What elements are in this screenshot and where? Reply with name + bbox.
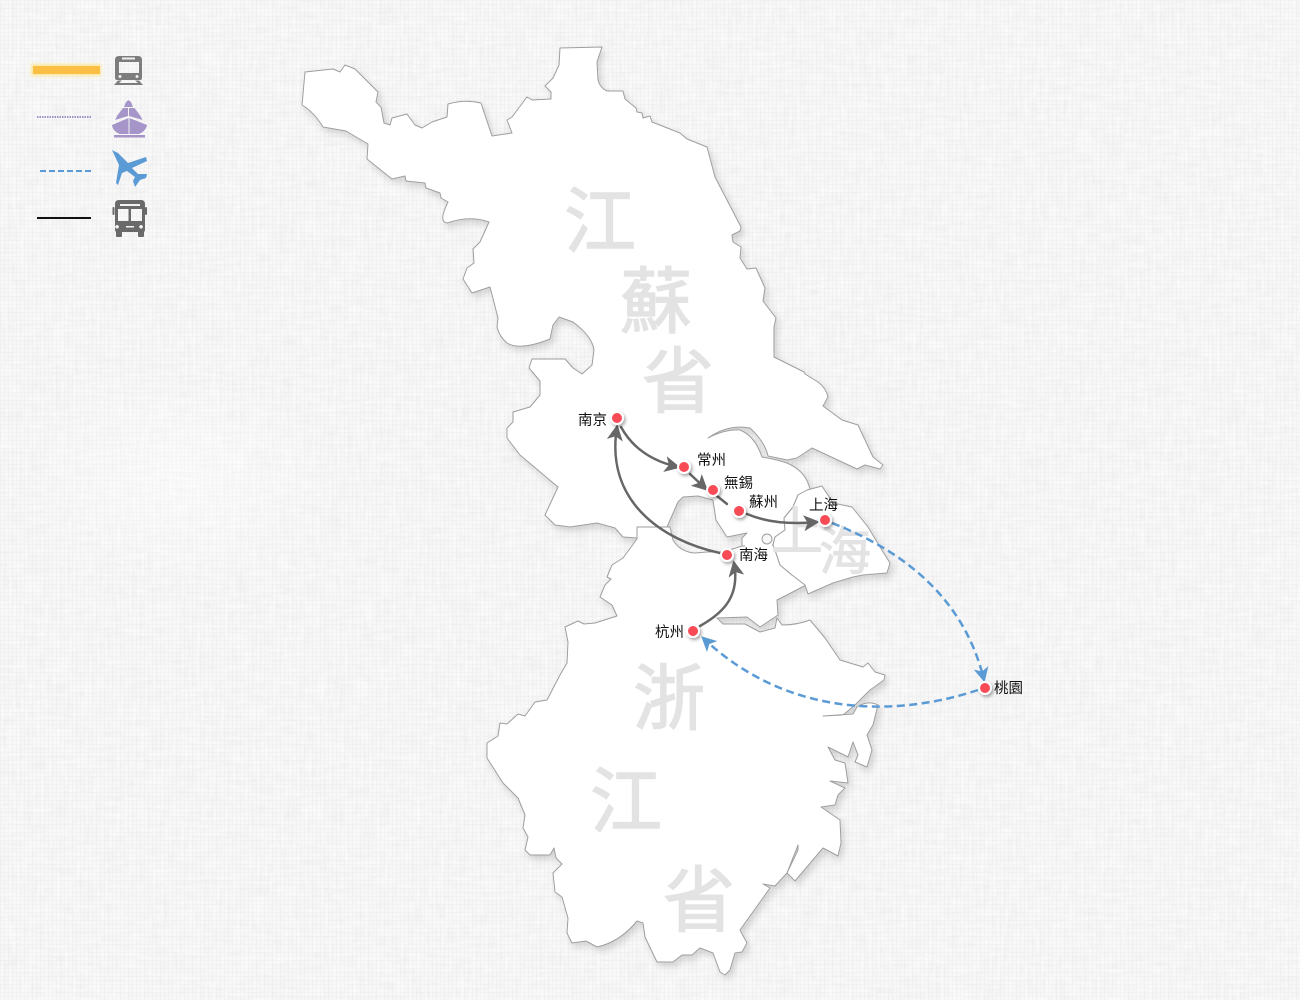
city: Shanghai (809, 497, 838, 527)
city: Changzhou (677, 452, 726, 474)
route: Shanghai to Taoyuan (832, 523, 984, 680)
legend: bus line (37, 217, 91, 219)
city: Wuxi (706, 475, 753, 497)
map: provinces (302, 47, 890, 975)
lake: Dianshan (762, 534, 772, 544)
route: Nanhai to Nanjing (615, 427, 720, 553)
city: Shanghai: 上海 (809, 497, 838, 514)
region: Shanghai (773, 486, 890, 594)
watermark: Shanghai: 上 (771, 504, 823, 562)
city: Changzhou: 常州 (697, 452, 726, 469)
watermark: Zhejiang (590, 660, 735, 942)
watermark: Zhejiang: 浙 (633, 660, 705, 740)
icon: bus (112, 200, 147, 237)
route: Suzhou to Shanghai (747, 514, 817, 523)
city: Hangzhou (655, 624, 700, 641)
route: Taoyuan to Hangzhou (703, 638, 978, 707)
route: Hangzhou to Nanhai (700, 563, 735, 626)
watermark: Jiangsu: 江 (564, 183, 636, 263)
legend: ferry line (37, 116, 91, 118)
city: Nanjing: 南京 (578, 412, 607, 429)
route: Nanjing to Changzhou (621, 427, 678, 467)
icon: plane (112, 150, 147, 187)
watermark: Shanghai: 海 (819, 524, 871, 582)
legend (31, 56, 147, 237)
legend: flight line (40, 170, 91, 172)
region: Jiangsu (302, 47, 883, 546)
city: Nanjing (578, 411, 624, 429)
legend: rail line (31, 64, 101, 76)
watermark: Jiangsu: 蘇 (620, 263, 692, 343)
icon: train (114, 56, 143, 85)
city: Taoyuan: 桃園 (994, 680, 1023, 697)
watermark: Zhejiang: 江 (590, 763, 662, 843)
cities (578, 411, 1023, 697)
land masses with a shared drop shadow (302, 47, 890, 975)
city: Hangzhou: 杭州 (655, 624, 684, 641)
routes (615, 427, 984, 707)
mask hiding the internal border between Jiangsu and Zhejiang (745, 544, 772, 547)
watermark: Shanghai (771, 504, 871, 582)
city: Suzhou (732, 494, 778, 518)
watermark: Jiangsu: 省 (642, 343, 714, 423)
city: Wuxi: 無錫 (724, 475, 753, 492)
watermark: Jiangsu (564, 183, 714, 423)
icon: ship (112, 100, 147, 138)
region: Zhejiang (487, 527, 885, 975)
city: Suzhou: 蘇州 (749, 494, 778, 511)
route: Changzhou to Wuxi (690, 474, 706, 489)
city: Nanhai (720, 547, 768, 564)
city: Nanhai: 南海 (739, 547, 768, 564)
watermark: Zhejiang: 省 (663, 862, 735, 942)
city: Taoyuan (978, 680, 1023, 697)
route: Wuxi to Suzhou (717, 496, 727, 504)
